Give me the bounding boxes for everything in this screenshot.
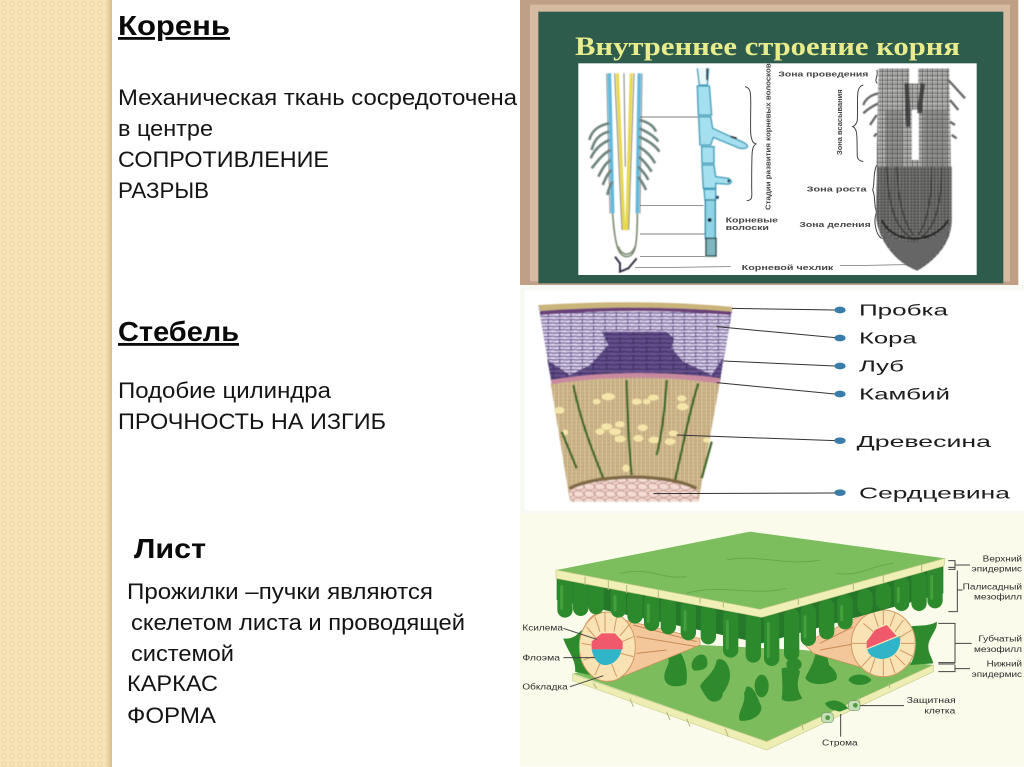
leaf labels: эпидермис (972, 564, 1023, 574)
leaf labels: Палисадный (963, 581, 1022, 591)
panel: leaf diagram (520, 513, 1024, 767)
stem labels: Кора (859, 331, 917, 348)
zone labels: Зона всасывания (837, 89, 844, 155)
label: hair development stages: Стадии развития корневых волосков (766, 63, 773, 210)
leader lines (563, 561, 972, 737)
text block: stem: ПРОЧНОСТЬ НА ИЗГИБ (118, 409, 386, 434)
wood (551, 376, 720, 502)
rays (562, 380, 712, 480)
title: internal structure of the root: Внутреннее строение корня (575, 32, 960, 61)
text block: leaf: КАРКАС (127, 671, 218, 696)
lower plate (573, 645, 933, 750)
left root section (589, 73, 659, 272)
leaf labels: Губчатый (978, 634, 1022, 644)
leaf labels: Строма (822, 737, 858, 747)
vessels (554, 393, 710, 472)
bark (538, 303, 733, 383)
zone labels: Зона деления (799, 222, 871, 229)
label: root hairs: Корневые (726, 218, 778, 225)
stem labels: Древесина (857, 434, 991, 451)
text block: leaf (127, 579, 465, 728)
root hair cell development (697, 68, 747, 256)
guard cells (822, 701, 860, 723)
zone braces (853, 70, 882, 239)
text block: root (118, 85, 518, 203)
cambium (551, 373, 721, 384)
leaf labels (522, 553, 1023, 747)
palisade mesophyll (557, 566, 943, 658)
zone labels: Корневой чехлик (742, 264, 834, 272)
text block: root: СОПРОТИВЛЕНИЕ (118, 147, 329, 172)
bullets (834, 307, 846, 496)
text block: root: РАЗРЫВ (118, 178, 209, 203)
panel: stem diagram (520, 285, 1024, 515)
text block: root: в центре (118, 116, 213, 141)
leaf labels: Обкладка (522, 682, 568, 692)
pith (569, 477, 698, 502)
leaf labels: клетка (924, 705, 956, 715)
diagram white panel (578, 63, 977, 275)
label: root hairs: волоски (726, 225, 769, 232)
leaf labels: Защитная (907, 695, 956, 705)
text block: leaf: скелетом листа и проводящей (131, 610, 465, 635)
leader lines (653, 308, 835, 494)
vein: left (579, 612, 700, 682)
spongy mesophyll (563, 622, 937, 721)
zone labels (742, 71, 871, 272)
vein: right (803, 610, 915, 677)
zone labels: Зона роста (807, 187, 867, 194)
heading: stem: Стебель (118, 316, 239, 347)
right root micrograph (863, 68, 965, 271)
cork (538, 302, 733, 312)
text block: root: Механическая ткань сосредоточена (118, 85, 518, 110)
leaf labels: мезофилл (974, 644, 1022, 654)
panel: root diagram (520, 0, 1018, 286)
label: root hairs (726, 218, 778, 232)
leaf labels: Нижний (987, 658, 1022, 668)
leader lines (635, 117, 910, 268)
heading: root: Корень (118, 10, 230, 41)
chalkboard (538, 12, 1003, 283)
stem labels: Пробка (859, 303, 948, 320)
decorative side strip (0, 0, 112, 767)
leaf labels: эпидермис (972, 669, 1023, 679)
text block: stem (118, 378, 386, 434)
dark phloem (547, 332, 723, 383)
leaf labels: мезофилл (974, 591, 1022, 601)
leaf labels: Флоэма (522, 653, 560, 663)
stem cross-section (538, 302, 733, 502)
leaf labels: Верхний (983, 553, 1022, 563)
heading: leaf: Лист (134, 533, 206, 564)
text block: leaf: системой (131, 641, 234, 666)
text block: stem: Подобие цилиндра (118, 378, 332, 403)
stem labels (857, 303, 1010, 502)
text block: leaf: Прожилки –пучки являются (127, 579, 433, 604)
stem labels: Луб (859, 359, 904, 376)
stem labels: Сердцевина (859, 485, 1010, 502)
zone labels: Зона проведения (778, 71, 868, 78)
leaf labels: Ксилема (522, 623, 563, 633)
upper plate (556, 532, 945, 617)
brace (745, 87, 756, 201)
text block: leaf: ФОРМА (127, 703, 216, 728)
stem labels: Камбий (859, 387, 950, 404)
